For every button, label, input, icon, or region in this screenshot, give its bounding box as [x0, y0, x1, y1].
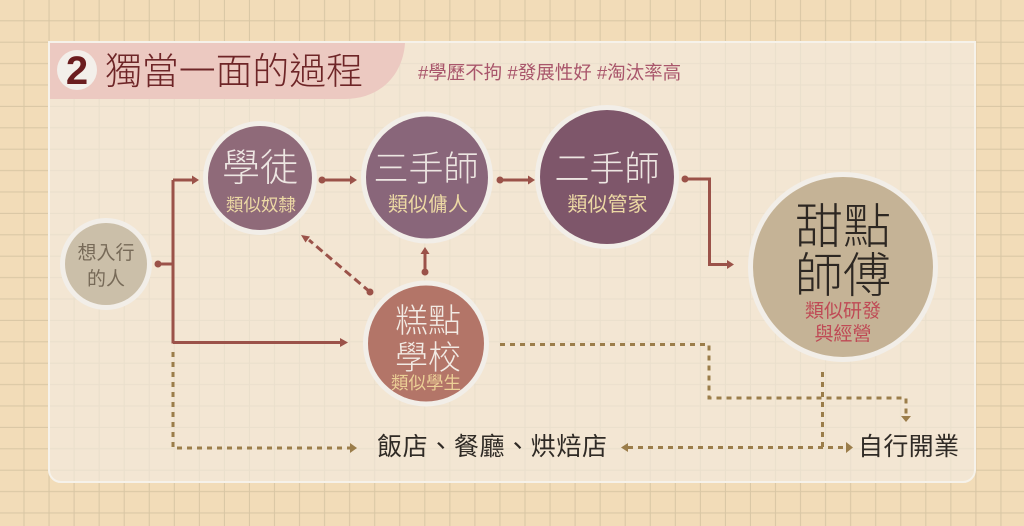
node: third cook: 類似傭人	[388, 193, 468, 216]
arrow: main solid routes	[154, 176, 734, 347]
arrow: school to apprentice dashed	[301, 235, 374, 296]
node: pastry chef	[748, 172, 938, 362]
route: pastry chef to self-employment	[821, 372, 824, 448]
node: apprentice	[203, 121, 317, 235]
number badge	[57, 49, 97, 93]
route: aspirant to hotels	[173, 352, 357, 453]
node: second cook: 類似管家	[568, 193, 648, 216]
title banner	[50, 43, 405, 99]
arrows: dotted career routes	[173, 344, 911, 453]
node: pastry school: 糕點	[395, 302, 461, 339]
node: aspirant: 的人	[87, 268, 125, 290]
route: school to self-employment	[500, 344, 911, 422]
label: hotels, restaurants, bakeries: 飯店、餐廳、烘焙店	[377, 433, 607, 461]
banner shape	[50, 43, 405, 99]
arrow: school up to third cook	[420, 247, 430, 276]
node: pastry school: 類似學生	[391, 373, 461, 393]
arrow: third cook to second cook	[496, 176, 535, 184]
node: pastry chef: 師傅	[795, 250, 891, 303]
node: pastry chef: 甜點	[795, 201, 891, 254]
arrow: second cook to pastry chef	[682, 176, 734, 269]
node: aspirant	[60, 218, 152, 310]
route from aspirant to apprentice and school	[154, 176, 348, 347]
label: self-employment: 自行開業	[858, 433, 959, 461]
node: second cook: 二手師	[554, 150, 660, 189]
node: third cook: 三手師	[373, 150, 479, 189]
route: hotels to self-employment	[621, 442, 853, 453]
node: pastry school: 學校	[395, 339, 461, 376]
node: apprentice: 學徒	[222, 148, 298, 190]
node: apprentice: 類似奴隸	[226, 195, 296, 215]
panel: main paper card	[49, 42, 975, 482]
node: pastry chef: 類似研發	[805, 300, 881, 322]
hashtags: #學歷不拘 #發展性好 #淘汰率高	[418, 62, 681, 83]
number badge: 2	[66, 49, 88, 93]
node: pastry school	[363, 280, 489, 406]
node: second cook	[535, 105, 679, 249]
node: aspirant: 想入行	[77, 242, 135, 264]
node: pastry chef: 與經營	[814, 323, 872, 345]
node: third cook	[361, 112, 493, 244]
arrow: apprentice to third cook	[318, 176, 357, 184]
title: 獨當一面的過程	[105, 51, 363, 92]
